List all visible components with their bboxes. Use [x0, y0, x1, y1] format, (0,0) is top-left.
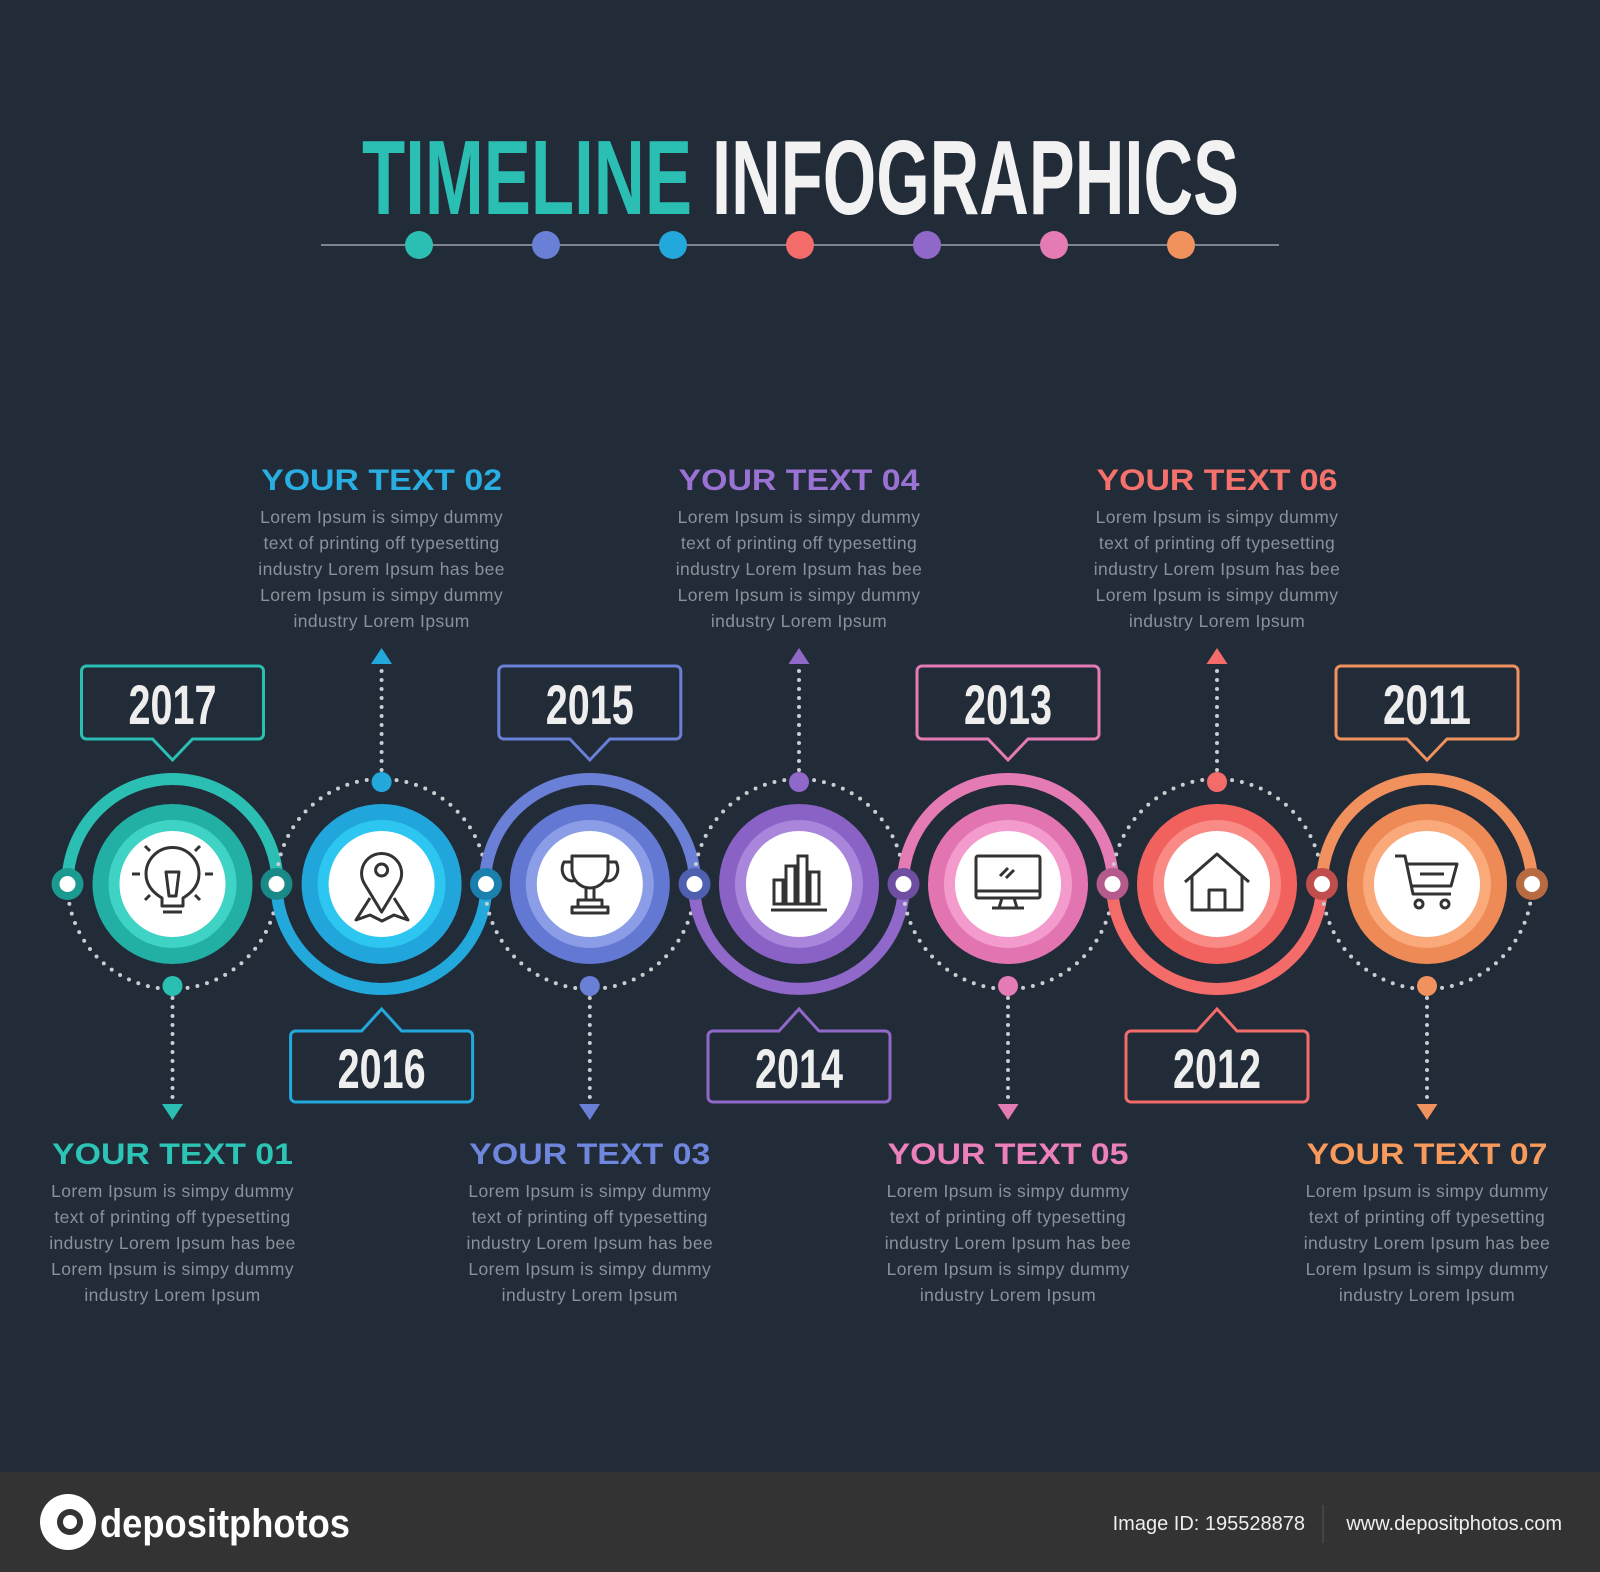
title line with dots — [321, 231, 1279, 259]
text 07: text of printing off typesetting — [1309, 1207, 1545, 1227]
text 02 — [258, 464, 505, 631]
step 1: 2017 — [49, 666, 296, 1305]
text 03: Lorem Ipsum is simpy dummy — [468, 1181, 711, 1201]
text 02: industry Lorem Ipsum — [293, 611, 470, 631]
text 07: Lorem Ipsum is simpy dummy — [1306, 1181, 1548, 1201]
year box 2016: 2016 — [338, 1037, 426, 1100]
year box 2016 — [291, 1009, 473, 1102]
text 04: text of printing off typesetting — [681, 533, 917, 553]
text 03: industry Lorem Ipsum — [502, 1285, 678, 1305]
text 02: Lorem Ipsum is simpy dummy — [260, 507, 503, 527]
year box 2012: 2012 — [1173, 1037, 1261, 1100]
footer image id: Image ID: 195528878 — [1113, 1513, 1305, 1535]
icon: bar chart — [771, 856, 827, 910]
text 03 — [466, 1138, 713, 1305]
text 01: Lorem Ipsum is simpy dummy — [51, 1259, 294, 1279]
text 03: text of printing off typesetting — [472, 1207, 708, 1227]
step 5: 2013 — [885, 666, 1131, 1305]
connector nodes — [52, 868, 1548, 900]
step 4: 2014 — [676, 464, 922, 1102]
text 04: industry Lorem Ipsum — [711, 611, 887, 631]
text 01: YOUR TEXT 01 — [52, 1138, 293, 1171]
step 7: 2011 — [1304, 666, 1550, 1305]
text 02: industry Lorem Ipsum has bee — [258, 559, 505, 579]
text 07: Lorem Ipsum is simpy dummy — [1306, 1259, 1548, 1279]
icon: trophy — [562, 856, 618, 913]
text 07: industry Lorem Ipsum — [1339, 1285, 1515, 1305]
step 6: 2012 — [1094, 464, 1340, 1102]
step 2: 2016 — [258, 464, 505, 1102]
text 05 — [885, 1138, 1131, 1305]
footer logo: depositphotos — [100, 1502, 350, 1546]
text 05: industry Lorem Ipsum — [920, 1285, 1096, 1305]
year box 2013 — [917, 666, 1099, 760]
text 07: YOUR TEXT 07 — [1306, 1138, 1548, 1171]
text 06: industry Lorem Ipsum — [1129, 611, 1305, 631]
text 07: industry Lorem Ipsum has bee — [1304, 1233, 1550, 1253]
step 3: 2015 — [466, 666, 713, 1305]
text 04: industry Lorem Ipsum has bee — [676, 559, 922, 579]
text 04: Lorem Ipsum is simpy dummy — [678, 507, 920, 527]
text 06: Lorem Ipsum is simpy dummy — [1096, 585, 1338, 605]
text 06: industry Lorem Ipsum has bee — [1094, 559, 1340, 579]
footer url: www.depositphotos.com — [1345, 1513, 1562, 1535]
text 02: text of printing off typesetting — [263, 533, 500, 553]
text 01: industry Lorem Ipsum has bee — [49, 1233, 296, 1253]
text 05: industry Lorem Ipsum has bee — [885, 1233, 1131, 1253]
text 01: industry Lorem Ipsum — [84, 1285, 261, 1305]
text 04: Lorem Ipsum is simpy dummy — [678, 585, 920, 605]
text 07 — [1304, 1138, 1550, 1305]
text 04: YOUR TEXT 04 — [678, 464, 920, 497]
text 03: Lorem Ipsum is simpy dummy — [468, 1259, 711, 1279]
icon: house — [1185, 854, 1249, 910]
footer logo — [40, 1494, 350, 1550]
text 06: Lorem Ipsum is simpy dummy — [1096, 507, 1338, 527]
text 06 — [1094, 464, 1340, 631]
text 04 — [676, 464, 922, 631]
icon: light bulb — [132, 846, 213, 912]
text 06: YOUR TEXT 06 — [1096, 464, 1338, 497]
text 01 — [49, 1138, 296, 1305]
title: INFOGRAPHICS — [712, 119, 1239, 237]
text 05: text of printing off typesetting — [890, 1207, 1126, 1227]
text 01: Lorem Ipsum is simpy dummy — [51, 1181, 294, 1201]
year box 2015: 2015 — [546, 673, 634, 736]
text 06: text of printing off typesetting — [1099, 533, 1335, 553]
year box 2014 — [708, 1009, 890, 1102]
year box 2011 — [1336, 666, 1518, 760]
text 03: YOUR TEXT 03 — [469, 1138, 710, 1171]
text 05: YOUR TEXT 05 — [888, 1138, 1128, 1171]
text 02: Lorem Ipsum is simpy dummy — [260, 585, 503, 605]
year box 2017: 2017 — [128, 673, 216, 736]
title: TIMELINE — [362, 119, 692, 237]
icon: monitor — [976, 856, 1040, 908]
year box 2017 — [82, 666, 264, 760]
year box 2014: 2014 — [755, 1037, 843, 1100]
text 03: industry Lorem Ipsum has bee — [466, 1233, 713, 1253]
text 02: YOUR TEXT 02 — [261, 464, 502, 497]
title — [362, 119, 1239, 237]
icon: map pin — [356, 853, 408, 921]
icon: cart — [1395, 856, 1457, 908]
year box 2015 — [499, 666, 681, 760]
footer bar — [0, 1472, 1600, 1572]
year box 2011: 2011 — [1383, 673, 1471, 736]
year box 2013: 2013 — [964, 673, 1052, 736]
text 05: Lorem Ipsum is simpy dummy — [887, 1259, 1129, 1279]
year box 2012 — [1126, 1009, 1308, 1102]
text 05: Lorem Ipsum is simpy dummy — [887, 1181, 1129, 1201]
text 01: text of printing off typesetting — [54, 1207, 291, 1227]
